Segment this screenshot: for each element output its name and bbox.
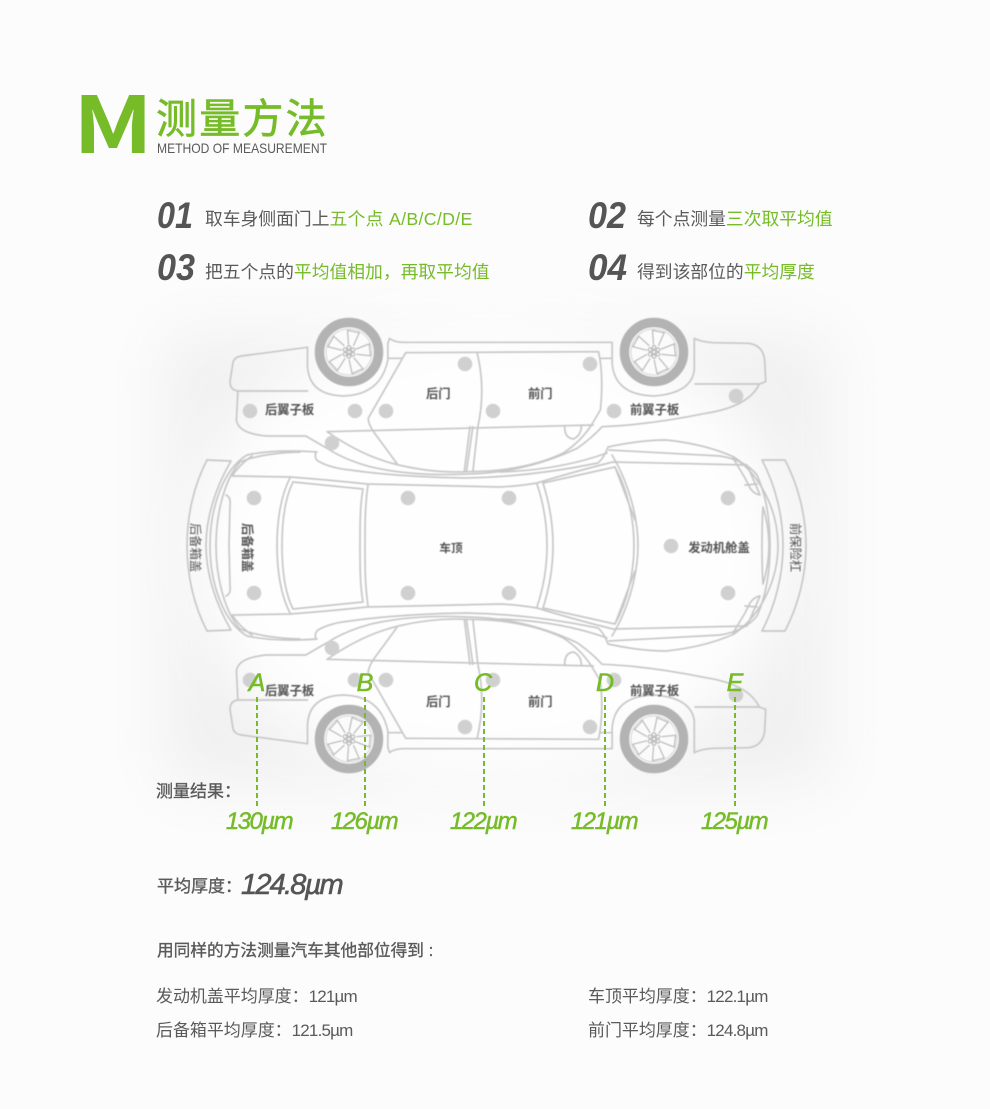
step 03 [157, 247, 490, 288]
side view labels, upper car: 前门 [528, 386, 553, 401]
top-down car upper half [187, 440, 806, 546]
step 02: 02 [588, 195, 626, 236]
side view labels, lower car: 后门 [426, 694, 451, 709]
measurement point E: E [727, 669, 744, 697]
subtitle: METHOD OF MEASUREMENT [157, 140, 327, 156]
side view labels, upper car [265, 386, 680, 417]
title block [73, 64, 329, 176]
measurement point A [226, 669, 293, 835]
side view labels, lower car: 前门 [528, 694, 553, 709]
measurement point C: C [474, 669, 493, 697]
roof and hood dots [401, 491, 735, 600]
top-down labels: 后备箱盖 [188, 523, 203, 572]
result: trunk: 后备箱平均厚度：121.5µm [156, 1021, 353, 1040]
side view labels, upper car: 后翼子板 [265, 402, 315, 417]
heading: 测量方法 [156, 96, 329, 142]
top-down labels: 前保险杠 [788, 523, 803, 572]
side view labels, lower car: 后翼子板 [265, 683, 315, 698]
top-down labels [188, 523, 803, 572]
average thickness: 平均厚度： [157, 877, 242, 896]
measurement point B: 126µm [331, 808, 398, 835]
step 03: 把五个点的平均值相加，再取平均值 [205, 262, 490, 282]
side dots [243, 357, 743, 450]
side view labels, lower car [265, 683, 680, 709]
results label: 测量结果： [156, 782, 241, 801]
measurement point D [571, 669, 638, 835]
other parts heading: 用同样的方法测量汽车其他部位得到 : [157, 941, 433, 960]
measurement point E [701, 669, 768, 835]
big letter M: M [73, 64, 153, 176]
top-down car lower half [187, 546, 806, 651]
side view labels, lower car: 前翼子板 [630, 683, 680, 698]
step 03: 03 [157, 247, 195, 288]
diagram background glow [165, 315, 830, 785]
measurement point D: D [596, 669, 614, 697]
step 02 [588, 195, 833, 236]
side view labels, upper car: 后门 [426, 386, 451, 401]
average thickness [157, 869, 342, 901]
measurement point D: 121µm [571, 808, 638, 835]
boot dot [247, 491, 261, 505]
top-down labels: 发动机舱盖 [688, 540, 750, 555]
step 01 [157, 195, 473, 236]
measurement point A: 130µm [226, 808, 293, 835]
measurement point B [331, 669, 398, 835]
wheel [320, 322, 378, 382]
side view car (upper, flipped) [230, 322, 766, 475]
measurement point E: 125µm [701, 808, 768, 835]
top-down labels: 后备箱盖 [240, 523, 255, 572]
measurement point B: B [357, 669, 373, 697]
step 04 [588, 247, 815, 288]
top-down labels: 车顶 [439, 541, 463, 555]
average thickness: 124.8µm [241, 869, 342, 901]
step 01: 01 [157, 195, 193, 236]
measurement point A: A [247, 669, 265, 697]
measurement point C [450, 669, 517, 835]
step 01: 取车身侧面门上五个点 A/B/C/D/E [205, 209, 473, 229]
result: roof: 车顶平均厚度：122.1µm [588, 987, 768, 1006]
side view car (lower) [230, 616, 766, 768]
step 02: 每个点测量三次取平均值 [637, 209, 833, 229]
car diagram [187, 322, 806, 768]
result: hood: 发动机盖平均厚度：121µm [156, 987, 358, 1006]
second wheel [624, 322, 684, 382]
measurement point C: 122µm [450, 808, 517, 835]
side view labels, upper car: 前翼子板 [630, 402, 680, 417]
step 04: 04 [588, 247, 627, 288]
step 04: 得到该部位的平均厚度 [637, 262, 815, 282]
result: front door: 前门平均厚度：124.8µm [588, 1021, 768, 1040]
